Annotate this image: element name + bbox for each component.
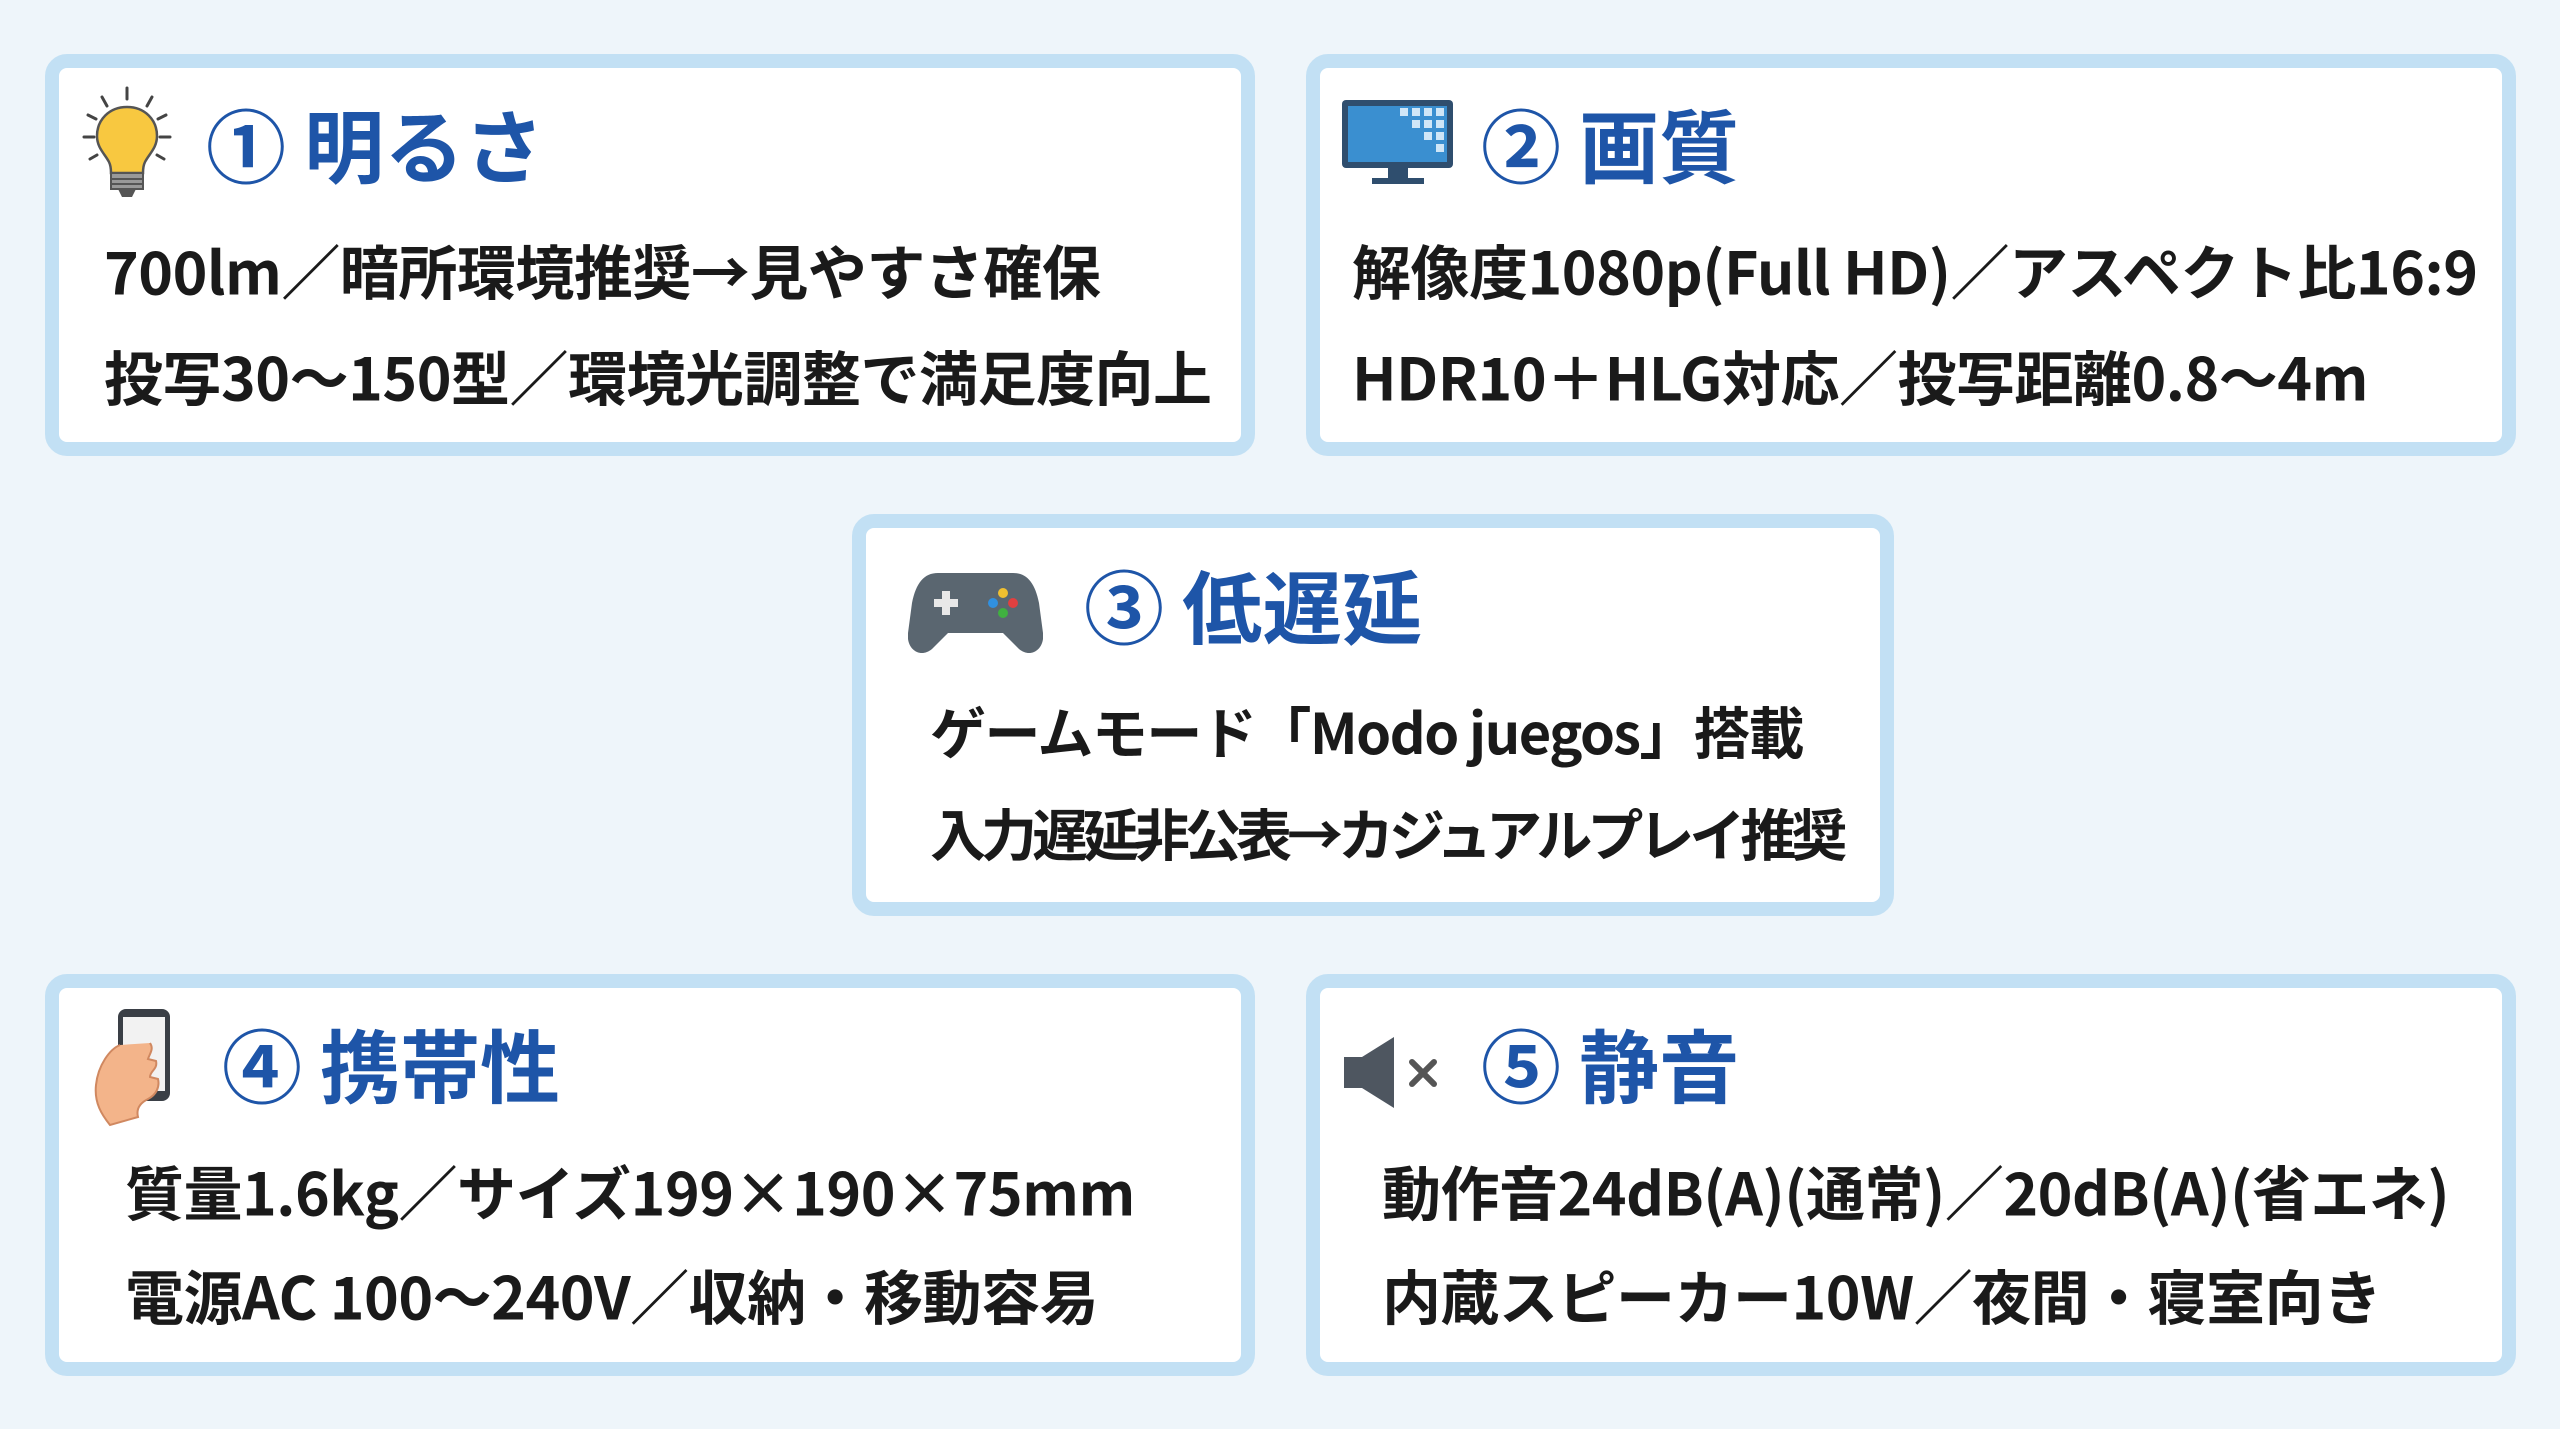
icon: hand with smartphone (94, 1009, 170, 1126)
panel: low latency (852, 514, 1894, 916)
title: image quality: ② 画質 (1481, 85, 1739, 201)
title: quiet: ⑤ 静音 (1481, 1005, 1739, 1121)
title: low latency: ③ 低遅延 (1084, 546, 1422, 662)
panel: brightness (45, 54, 1255, 456)
text: portability line 1: 質量1.6kg／サイズ199×190×75mm (125, 1148, 1135, 1232)
title: brightness: ① 明るさ (206, 85, 544, 201)
icon: muted speaker (1344, 1037, 1437, 1108)
text: low latency line 1: ゲームモード「Modo juegos」搭載 (930, 690, 1803, 771)
icon: monitor (1342, 100, 1453, 184)
title: portability: ④ 携帯性 (222, 1005, 560, 1121)
text: portability line 2: 電源AC 100〜240V／収納・移動容易 (125, 1252, 1098, 1336)
text: quiet line 1: 動作音24dB(A)(通常)／20dB(A)(省エネ) (1382, 1148, 2449, 1232)
panel: image quality (1306, 54, 2516, 456)
text: image quality line 1: 解像度1080p(Full HD)／アスペクト比16:9 (1352, 226, 2478, 312)
text: image quality line 2: HDR10＋HLG対応／投写距離0.8〜4m (1352, 332, 2368, 418)
text: quiet line 2: 内蔵スピーカー10W／夜間・寝室向き (1382, 1252, 2382, 1336)
panel: portability (45, 974, 1255, 1376)
text: low latency line 2: 入力遅延非公表→カジュアルプレイ推奨 (930, 792, 1842, 873)
panel: quiet (1306, 974, 2516, 1376)
icon: light bulb (82, 86, 172, 197)
text: brightness line 2: 投写30〜150型／環境光調整で満足度向上 (104, 332, 1212, 418)
text: brightness line 1: 700lm／暗所環境推奨→見やすさ確保 (104, 226, 1100, 312)
icon: game controller (908, 573, 1043, 653)
